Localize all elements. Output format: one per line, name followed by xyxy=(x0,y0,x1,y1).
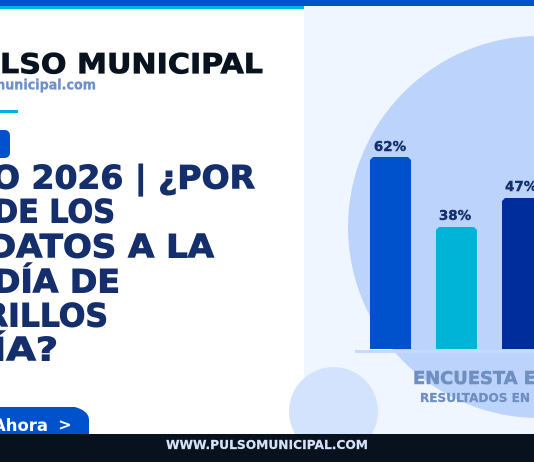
button: read now xyxy=(0,407,89,435)
headline xyxy=(0,158,255,368)
footer xyxy=(0,434,534,462)
logo: brand name: LSO MUNICIPAL xyxy=(0,47,263,80)
bar: 38% xyxy=(436,227,477,349)
bar: 47% xyxy=(502,198,534,349)
panel: right chart background xyxy=(289,6,534,456)
button: read now: > xyxy=(58,415,72,434)
chart caption: subtitle: RESULTADOS EN xyxy=(420,390,530,405)
chart baseline xyxy=(355,350,534,353)
bar chart xyxy=(355,139,534,353)
top bar xyxy=(0,0,534,9)
bar: 62% xyxy=(370,157,411,349)
value label: 38%: 38% xyxy=(439,208,472,224)
value label: 62%: 62% xyxy=(374,139,407,155)
accent line xyxy=(0,110,18,113)
footer: WWW.PULSOMUNICIPAL.COM xyxy=(166,437,368,452)
category badge xyxy=(0,130,10,158)
